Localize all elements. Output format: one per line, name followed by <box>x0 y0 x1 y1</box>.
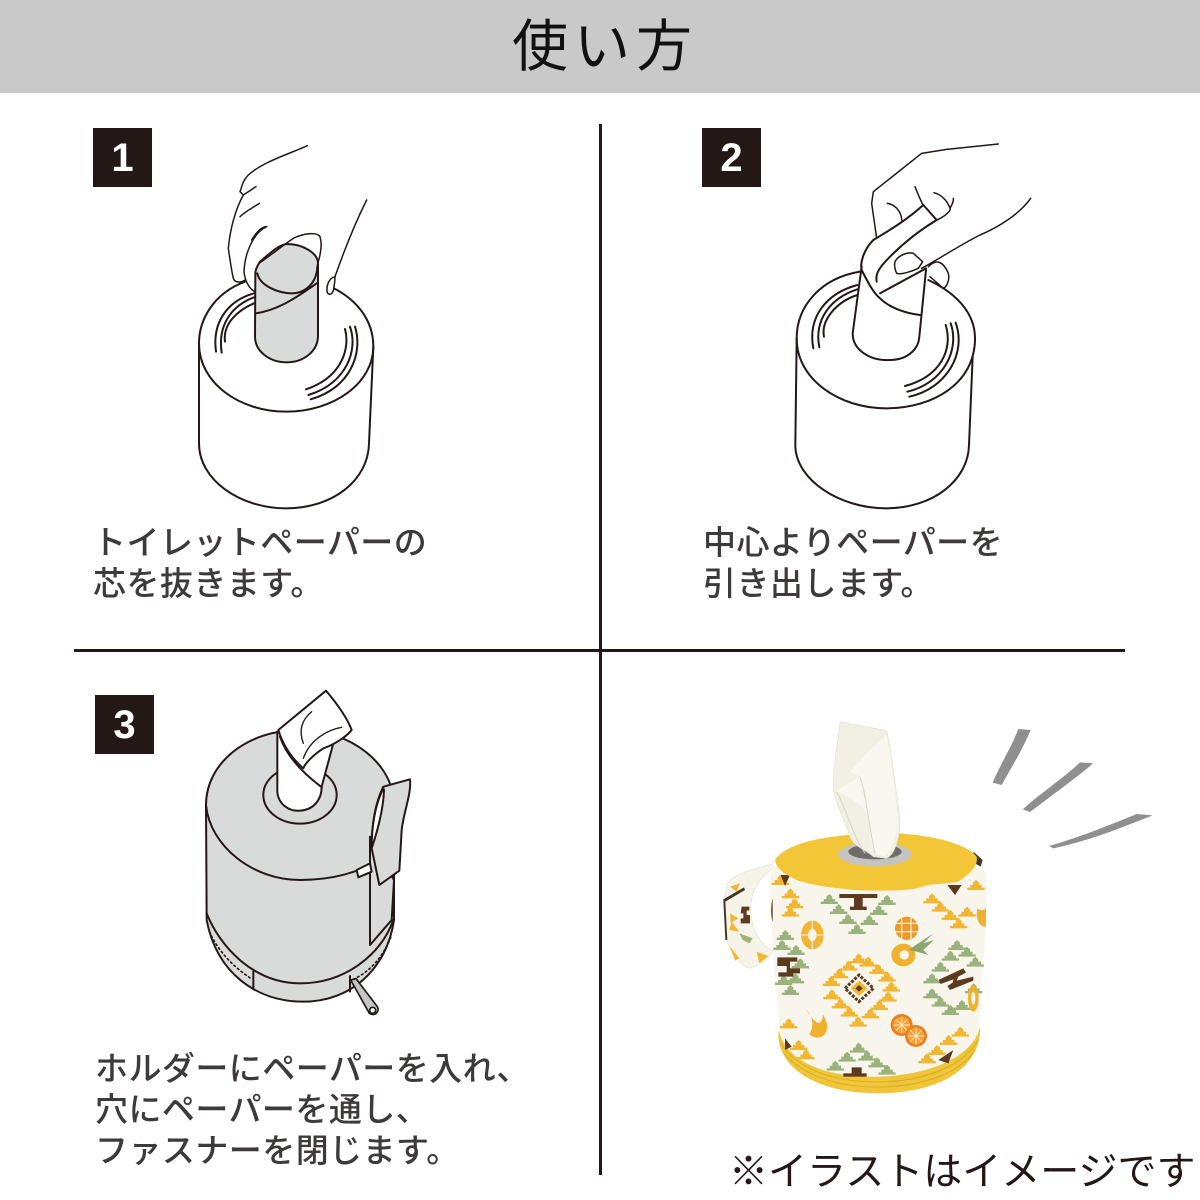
metal grommet <box>838 842 912 866</box>
paper through the hole <box>277 691 352 811</box>
note: illustration is for reference: ※イラストはイメージです <box>729 1151 1195 1194</box>
green chevron pattern <box>773 894 984 1075</box>
panel 1 instruction text: 芯を抜きます。 <box>93 565 324 602</box>
panel 2 instruction text: 中心よりペーパーを <box>703 524 1003 561</box>
hand <box>228 146 367 294</box>
yellow diamond pattern <box>772 875 985 1063</box>
panel 1 illustration: removing the core from the roll <box>198 144 374 510</box>
cardboard core <box>255 244 318 362</box>
panel 1 instruction text <box>93 524 427 602</box>
roll <box>199 282 373 508</box>
panel 2 step number: 2 <box>720 136 743 180</box>
panel 2 step number <box>702 128 761 187</box>
roll <box>795 272 975 508</box>
motion lines <box>993 729 1153 848</box>
brown motifs <box>771 875 973 1077</box>
product photo: patterned toilet paper holder <box>723 721 1152 1094</box>
side tab <box>357 779 410 945</box>
panel 2 instruction text: 引き出します。 <box>703 565 934 602</box>
panel 3 instruction text: ホルダーにペーパーを入れ、 <box>95 1050 530 1087</box>
handle strap <box>723 864 773 968</box>
panel 3 instruction text <box>95 1050 530 1169</box>
holder body <box>206 730 394 1002</box>
paper twist <box>853 205 937 360</box>
title: 使い方 <box>512 15 698 78</box>
panel 2 instruction text <box>703 524 1003 602</box>
panel 3 instruction text: ファスナーを閉じます。 <box>95 1132 460 1169</box>
header band <box>0 0 1200 93</box>
zipper pull <box>351 979 378 1014</box>
fabric body <box>770 858 987 1084</box>
panel 3 step number <box>95 695 154 754</box>
panel 1 step number: 1 <box>111 136 134 180</box>
panel 1 instruction text: トイレットペーパーの <box>93 524 427 561</box>
yellow top panel <box>775 833 983 891</box>
panel 3 illustration: holder with paper inserted <box>205 690 412 1016</box>
panel 3 instruction text: 穴にペーパーを通し、 <box>95 1091 429 1128</box>
panel 3 step number: 3 <box>113 703 136 747</box>
fruit motifs <box>801 907 986 1047</box>
zipper band <box>778 1027 980 1093</box>
hand <box>872 144 1031 288</box>
diamond centre <box>845 975 873 1002</box>
panel 1 step number <box>93 128 152 187</box>
panel 2 illustration: pulling paper from the centre <box>794 143 1032 510</box>
centre hole <box>263 766 337 824</box>
tissue <box>833 722 900 858</box>
